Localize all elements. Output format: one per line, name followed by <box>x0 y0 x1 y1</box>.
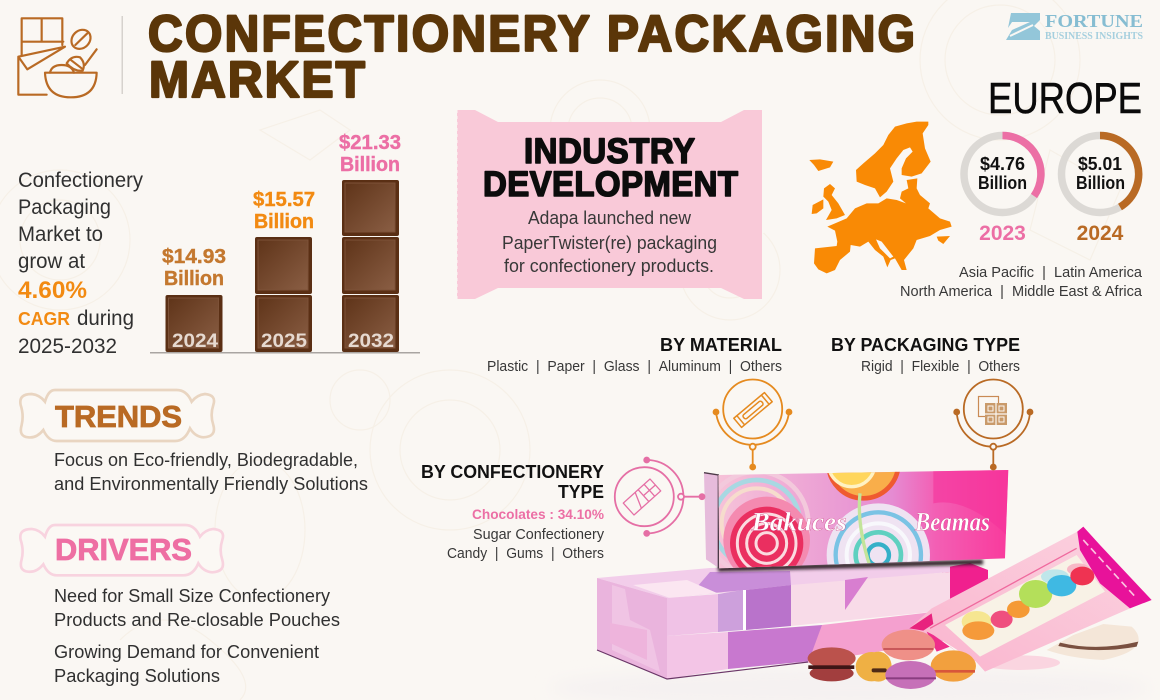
other regions <box>900 264 1143 300</box>
title: MARKET <box>149 51 365 108</box>
other regions: Asia Pacific | Latin America <box>959 264 1143 281</box>
drivers text: Need for Small Size Confectionery <box>54 586 330 606</box>
industry heading: INDUSTRY <box>524 132 695 171</box>
CAGR text block: Confectionery <box>18 169 143 192</box>
wrapper shape <box>457 110 762 299</box>
product: confectionery packaging photo <box>596 470 1152 689</box>
logo: Fortune Business Insights: FORTUNE <box>1045 11 1143 31</box>
industry text <box>502 207 717 276</box>
CAGR text block: 2025-2032 <box>18 335 117 358</box>
CAGR text block: grow at <box>18 250 85 273</box>
value labels: Billion <box>254 211 314 233</box>
title divider <box>122 16 123 94</box>
by material: Plastic | Paper | Glass | Aluminum | Others <box>487 358 782 375</box>
CAGR text block: Packaging <box>18 196 111 219</box>
logo: Fortune Business Insights <box>1006 11 1143 42</box>
bar 2024 <box>166 295 222 352</box>
trends text <box>54 450 368 494</box>
by material <box>487 335 782 375</box>
bar chart: market size <box>150 132 420 354</box>
icon: chocolate and candy bowl <box>18 18 97 97</box>
donut: 2024 <box>1062 135 1139 245</box>
value labels: $14.93 <box>162 246 226 268</box>
value labels: $15.57 <box>253 189 315 211</box>
box lettering: Bakuces <box>751 507 847 537</box>
by confectionery type: Candy | Gums | Others <box>447 546 604 562</box>
other regions: North America | Middle East & Africa <box>900 283 1143 300</box>
value labels: Billion <box>164 268 224 290</box>
drivers text: Growing Demand for Convenient <box>54 642 319 662</box>
by confectionery type: BY CONFECTIONERY <box>421 462 604 482</box>
CAGR text block <box>18 169 143 358</box>
drivers text <box>54 586 340 686</box>
icon: confectionery type <box>615 458 704 536</box>
title: CONFECTIONERY PACKAGING <box>148 5 915 62</box>
bar 2032: 2032 <box>348 331 394 352</box>
by material: BY MATERIAL <box>660 335 782 355</box>
other macarons <box>865 630 976 689</box>
beige biscuit <box>1047 624 1139 660</box>
bar 2032 <box>342 180 399 352</box>
by packaging type: BY PACKAGING TYPE <box>831 335 1020 355</box>
macarons <box>808 630 976 689</box>
by packaging type <box>831 335 1020 375</box>
donut: 2023: $4.76 <box>980 154 1025 174</box>
industry heading: DEVELOPMENT <box>483 165 738 204</box>
donut: 2023: 2023 <box>979 222 1026 245</box>
lower box <box>597 562 988 679</box>
trends text: Focus on Eco-friendly, Biodegradable, <box>54 450 358 470</box>
by packaging type: Rigid | Flexible | Others <box>861 358 1020 375</box>
by confectionery type: TYPE <box>558 482 604 502</box>
by confectionery type <box>421 462 605 562</box>
bar 2024: 2024 <box>172 331 218 352</box>
panel: drivers <box>20 525 340 686</box>
trends candy badge <box>20 390 214 441</box>
donut: 2024: $5.01 <box>1078 154 1122 174</box>
upper box: Beamas <box>914 507 990 537</box>
bar 2025: 2025 <box>261 331 307 352</box>
logo: Fortune Business Insights: BUSINESS INSIGHTS <box>1045 31 1143 42</box>
industry text: PaperTwister(re) packaging <box>502 232 717 253</box>
drivers heading: DRIVERS <box>55 532 192 567</box>
bar 2025 <box>255 237 312 352</box>
by confectionery type: Sugar Confectionery <box>473 527 605 543</box>
by confectionery type: Chocolates : 34.10% <box>472 506 605 522</box>
heading: Europe: EUROPE <box>988 74 1142 123</box>
map: Europe <box>809 122 952 273</box>
trends text: and Environmentally Friendly Solutions <box>54 474 368 494</box>
brown macaron <box>808 647 888 681</box>
candy pouch <box>909 527 1152 672</box>
industry text: Adapa launched new <box>528 207 692 228</box>
industry heading <box>483 132 738 204</box>
drivers candy badge <box>20 525 223 575</box>
CAGR text block: Market to <box>18 223 103 246</box>
drivers text: Packaging Solutions <box>54 666 220 686</box>
donut: 2023: Billion <box>978 173 1027 193</box>
value labels: $21.33 <box>339 132 401 154</box>
panel: industry development <box>456 110 763 299</box>
trends heading: TRENDS <box>55 399 182 434</box>
donut: 2023 <box>964 136 1041 245</box>
icon: material <box>714 380 792 470</box>
value labels <box>162 132 401 290</box>
value labels: Billion <box>340 154 400 176</box>
CAGR text block: during <box>77 307 134 330</box>
title <box>148 5 915 108</box>
panel: trends <box>20 390 368 494</box>
donut: 2024: Billion <box>1076 173 1125 193</box>
icon: packaging type <box>954 380 1032 470</box>
donut: 2024: 2024 <box>1077 222 1124 245</box>
upper box <box>704 470 1008 568</box>
CAGR text block: 4.60% <box>18 277 87 304</box>
industry text: for confectionery products. <box>504 255 714 276</box>
CAGR text block: CAGR <box>18 309 70 329</box>
drivers text: Products and Re-closable Pouches <box>54 610 340 630</box>
